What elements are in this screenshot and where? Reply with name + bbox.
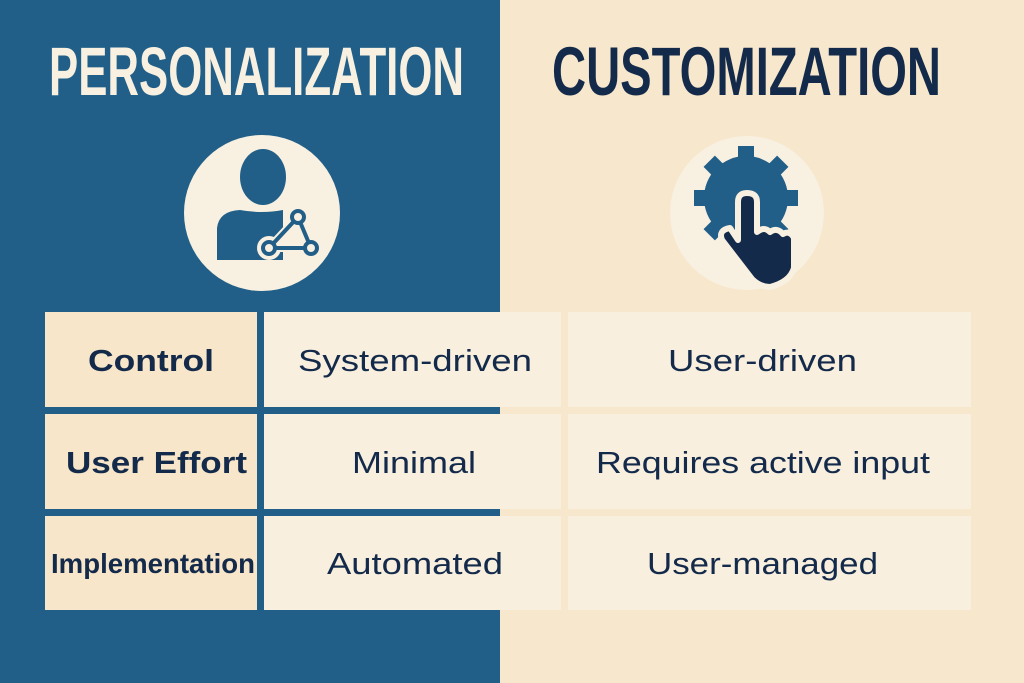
row: implementation: Implementation xyxy=(51,548,255,579)
table xyxy=(45,312,971,610)
panel: right background xyxy=(500,0,1024,683)
icon: user with network xyxy=(184,135,340,291)
row: implementation: Automated xyxy=(327,546,503,581)
row: implementation: User-managed xyxy=(647,546,878,581)
row: control xyxy=(45,312,971,407)
row: implementation xyxy=(45,516,971,610)
row: user effort: User Effort xyxy=(66,445,247,480)
panel: left background xyxy=(0,0,500,683)
title: personalization: PERSONALIZATION xyxy=(49,33,464,110)
row: user effort: Minimal xyxy=(352,445,476,480)
row: control: User-driven xyxy=(668,343,857,378)
row: control: System-driven xyxy=(298,343,532,378)
row: user effort: Requires active input xyxy=(596,445,930,480)
row: control: Control xyxy=(88,343,214,378)
row: user effort xyxy=(45,414,971,509)
icon: gear with pointing hand xyxy=(670,136,824,290)
